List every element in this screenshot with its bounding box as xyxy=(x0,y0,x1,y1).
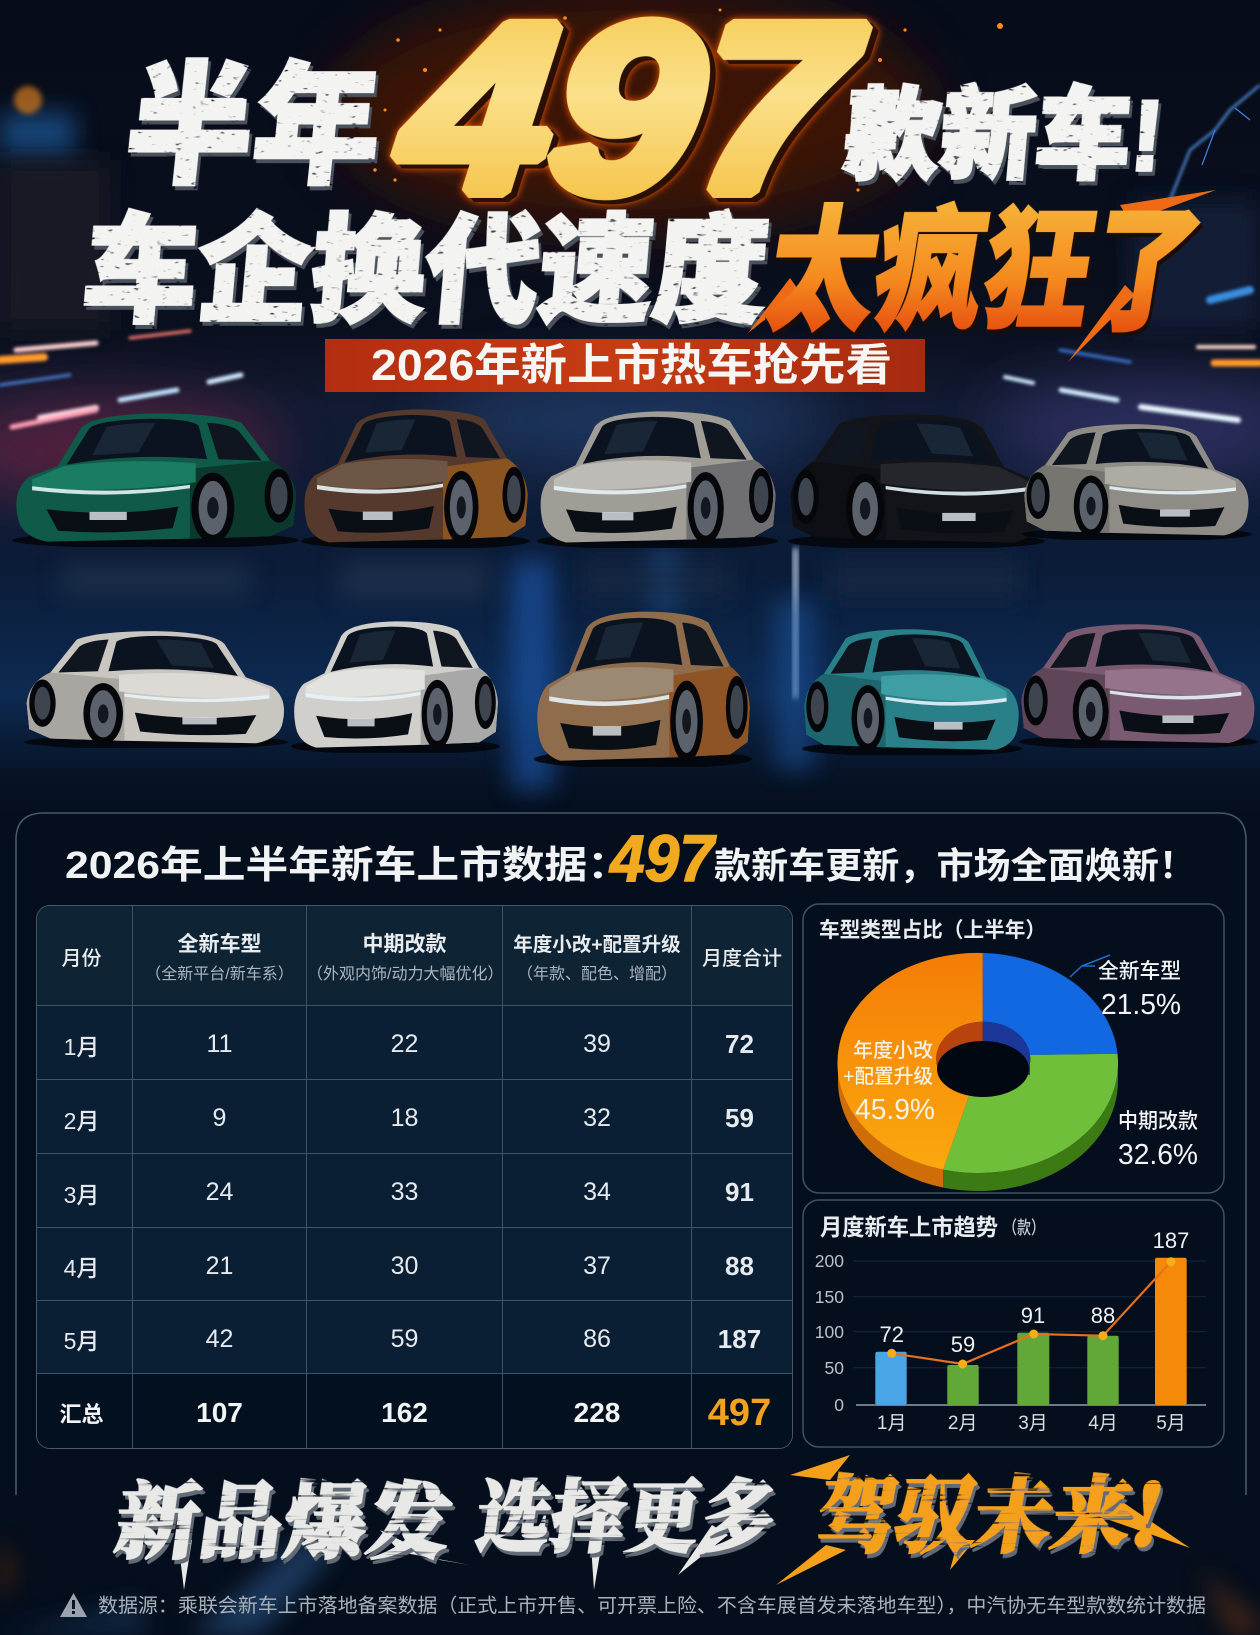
leader line xyxy=(1070,955,1110,977)
table header row: 中期改款 xyxy=(362,933,446,956)
row: totals xyxy=(37,1374,792,1448)
label: mid-cycle: 32.6% xyxy=(1118,1139,1198,1171)
slogan: 驾驭未来!: 驾驭未来! xyxy=(808,1450,1174,1570)
row: May xyxy=(37,1301,792,1374)
axis and gridlines: 100 xyxy=(815,1322,844,1342)
row: February xyxy=(37,1080,792,1154)
row: May: 187 xyxy=(718,1324,761,1354)
row: January: 11 xyxy=(207,1030,232,1058)
row: April: 4月 xyxy=(64,1255,99,1281)
donut title: 车型类型占比（上半年） xyxy=(819,919,1046,942)
label: new models: 21.5% xyxy=(1101,989,1181,1021)
table header row xyxy=(37,906,792,1006)
section heading: 2026年上半年新车上市数据： xyxy=(65,845,630,887)
car: green coupe SUV xyxy=(12,413,299,548)
row: April: 21 xyxy=(206,1252,233,1280)
row: totals: 107 xyxy=(196,1397,243,1428)
car: brown SUV xyxy=(301,409,530,549)
row: February: 32 xyxy=(583,1104,611,1132)
icon: warning triangle xyxy=(60,1593,87,1617)
table header row: 全新车型 xyxy=(178,933,262,956)
banner: 2026 new cars: 2026年新上市热车抢先看 xyxy=(371,341,892,390)
row: totals: 汇总 xyxy=(59,1402,104,1427)
label: annual update: +配置升级 xyxy=(843,1065,933,1088)
label: mid-cycle: 中期改款 xyxy=(1118,1110,1198,1133)
row: March: 3月 xyxy=(64,1182,99,1208)
row: March: 91 xyxy=(725,1177,754,1207)
row: February: 9 xyxy=(213,1104,226,1132)
table header row: （年款、配色、增配） xyxy=(517,966,677,983)
value labels: 88 xyxy=(1091,1303,1115,1328)
month labels: 1月 xyxy=(877,1413,906,1434)
label: annual update: 45.9% xyxy=(855,1094,935,1126)
car: bronze SUV xyxy=(534,612,752,769)
chart title: （款） xyxy=(1003,1218,1045,1238)
source note: 数据源：乘联会新车上市落地备案数据（正式上市开售、可开票上险、不含车展首发未落地车型），中汽协无车型款数统计数据 xyxy=(98,1595,1206,1617)
row: totals: 162 xyxy=(381,1397,428,1428)
axis and gridlines: 0 xyxy=(834,1395,844,1415)
bars xyxy=(875,1258,1187,1405)
table header row: （全新平台/新车系） xyxy=(145,966,294,983)
row: May: 5月 xyxy=(64,1328,99,1354)
axis and gridlines: 200 xyxy=(815,1251,844,1271)
row: January xyxy=(37,1006,792,1080)
slogan: 选择更多: 选择更多 xyxy=(469,1452,785,1568)
car: silver SUV xyxy=(1022,424,1252,541)
label: new models xyxy=(1098,960,1181,1021)
row: May: 42 xyxy=(206,1324,233,1352)
value labels: 72 xyxy=(879,1322,904,1347)
axis and gridlines: 150 xyxy=(815,1287,844,1307)
table header row: 年度小改+配置升级 xyxy=(513,934,681,956)
car lineup xyxy=(12,409,1258,769)
trend line xyxy=(887,1257,1176,1368)
value labels: 187 xyxy=(1153,1228,1189,1253)
row: April: 88 xyxy=(725,1250,754,1280)
table header row: 月度合计 xyxy=(702,948,782,970)
headline line 1: 半年: 半年 xyxy=(119,53,388,201)
row: April: 37 xyxy=(583,1252,611,1280)
axis and gridlines: 50 xyxy=(825,1358,844,1378)
row: May: 59 xyxy=(391,1324,418,1352)
row: January: 39 xyxy=(583,1030,611,1058)
row: January: 72 xyxy=(725,1029,754,1059)
section heading: 497 xyxy=(608,821,717,895)
data table xyxy=(36,905,793,1449)
car: black luxury SUV xyxy=(788,414,1045,549)
section heading xyxy=(65,821,1196,895)
month labels: 2月 xyxy=(948,1413,977,1434)
headline line 2: 车企换代速度: 车企换代速度 xyxy=(78,206,773,338)
row: January: 22 xyxy=(391,1030,418,1058)
panel: vehicle type share donut xyxy=(803,904,1224,1193)
headline line 1: 款新车!: 款新车! xyxy=(840,80,1168,192)
row: April xyxy=(37,1228,792,1301)
slogan: 新品爆发: 新品爆发 xyxy=(109,1455,460,1576)
row: February: 2月 xyxy=(64,1108,99,1134)
section heading: 款新车更新，市场全面焕新！ xyxy=(714,845,1196,886)
row: January: 1月 xyxy=(64,1034,99,1060)
chart title: 月度新车上市趋势 xyxy=(820,1214,998,1240)
bottom corner glows xyxy=(0,1540,1260,1635)
car: white crossover xyxy=(291,621,500,754)
label: mid-cycle xyxy=(1118,1110,1198,1171)
row: totals: 497 xyxy=(708,1392,771,1434)
table header row: （外观内饰/动力大幅优化） xyxy=(307,966,503,983)
value labels xyxy=(879,1228,1189,1357)
axis and gridlines xyxy=(815,1251,1206,1415)
row: February: 18 xyxy=(391,1104,418,1132)
label: annual update xyxy=(843,1039,935,1126)
row: April: 30 xyxy=(391,1252,418,1280)
month labels: 4月 xyxy=(1088,1413,1118,1434)
table header row: 月份 xyxy=(62,948,102,970)
label: annual update: 年度小改 xyxy=(853,1039,933,1062)
donut chart xyxy=(837,953,1118,1191)
panel: monthly trend chart xyxy=(803,1200,1224,1447)
month labels: 5月 xyxy=(1156,1413,1186,1434)
car: silver crossover xyxy=(537,411,778,549)
row: February: 59 xyxy=(725,1103,754,1133)
month labels: 3月 xyxy=(1018,1413,1048,1434)
car: teal sedan xyxy=(802,629,1022,756)
row: March: 24 xyxy=(206,1178,233,1206)
row: March xyxy=(37,1154,792,1228)
label: new models: 全新车型 xyxy=(1098,960,1181,983)
car: mauve SUV xyxy=(1019,624,1258,749)
value labels: 59 xyxy=(951,1332,975,1357)
row: May: 86 xyxy=(583,1324,611,1352)
car: white coupe xyxy=(24,631,288,749)
row: March: 33 xyxy=(391,1178,418,1206)
row: totals: 228 xyxy=(574,1397,620,1428)
month labels xyxy=(877,1413,1186,1434)
value labels: 91 xyxy=(1021,1303,1045,1328)
panel: data section frame xyxy=(16,813,1246,1495)
row: March: 34 xyxy=(583,1178,611,1206)
